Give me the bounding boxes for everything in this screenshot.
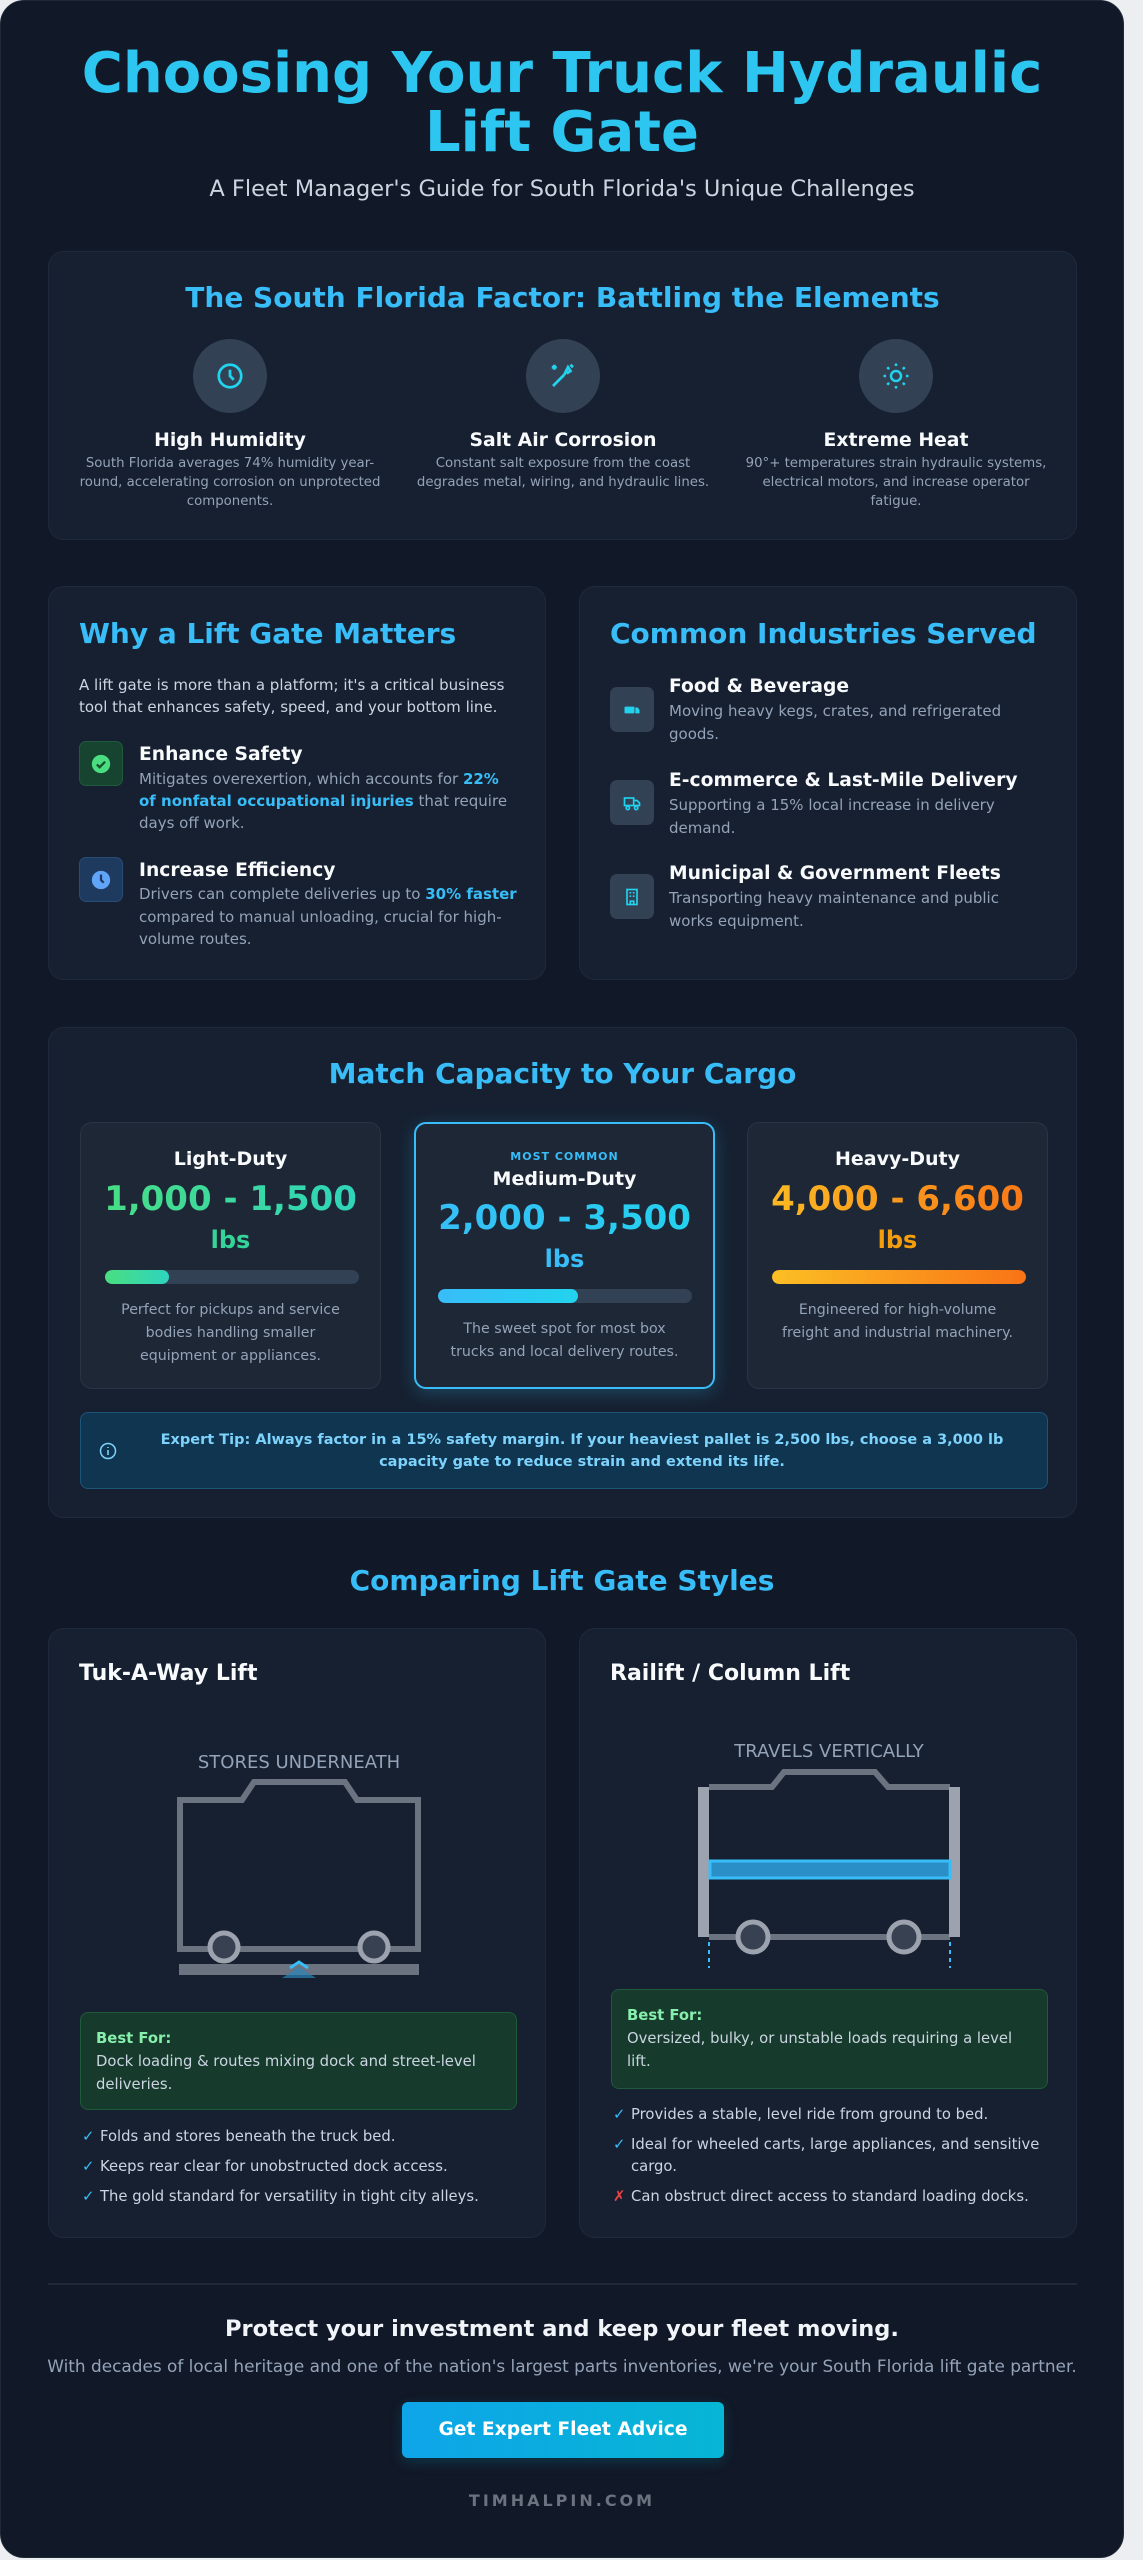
checklist: railift: Can obstruct direct access to standard loading docks.: [631, 2188, 1029, 2205]
best for: tuk-a-way: Best For:: [96, 2030, 171, 2047]
checklist: tuk-a-way: Folds and stores beneath the truck bed.: [100, 2128, 396, 2145]
icon: building: [610, 874, 654, 919]
title: Lift Gate: [425, 100, 699, 165]
button: Get Expert Fleet Advice: [438, 2419, 688, 2440]
card: heavy-duty: Heavy-Duty: [835, 1148, 960, 1170]
icon: delivery: [610, 780, 654, 825]
item: food & beverage: Moving heavy kegs, crates, and refrigerated goods.: [669, 702, 1001, 743]
item: food & beverage: [610, 676, 1001, 743]
checklist: tuk-a-way: The gold standard for versatility in tight city alleys.: [100, 2188, 479, 2205]
diagram: tuk-a-way truck: STORES UNDERNEATH: [198, 1752, 400, 1773]
card: medium-duty: lbs: [545, 1245, 584, 1273]
checklist: railift: ✓: [613, 2136, 625, 2153]
checklist: railift: Ideal for wheeled carts, large appliances, and sensitive cargo.: [631, 2136, 1039, 2175]
checklist: tuk-a-way: ✓: [82, 2128, 94, 2145]
card: light-duty: lbs: [211, 1226, 250, 1254]
checklist: tuk-a-way: [82, 2128, 479, 2205]
icon: clock: [79, 857, 123, 902]
card: light-duty: Perfect for pickups and service bodies handling smaller equipment or appliances.: [121, 1302, 340, 1364]
card: heavy-duty: [747, 1122, 1048, 1389]
item: increase efficiency: Increase Efficiency: [139, 860, 335, 881]
best for: tuk-a-way: Dock loading & routes mixing dock and street-level deliveries.: [96, 2053, 476, 2093]
column: salt air corrosion: [417, 339, 709, 490]
item: enhance safety: Enhance Safety: [139, 744, 303, 765]
icon: sun: [859, 339, 933, 413]
heading: south florida factor: The South Florida Factor: Battling the Elements: [185, 281, 940, 314]
card: heavy-duty: Engineered for high-volume: [799, 1302, 996, 1318]
item: increase efficiency: Drivers can complete deliveries up to 30% faster compared to manual unloading, crucial for high-volume routes.: [139, 885, 517, 948]
item: increase efficiency: [79, 857, 517, 948]
footer text: With decades of local heritage and one of the nation's largest parts inventories, we're your South Florida lift gate partner.: [47, 2356, 1077, 2376]
callout: expert tip: [80, 1412, 1048, 1489]
column: salt air corrosion: Salt Air Corrosion: [470, 430, 656, 451]
panel: railift: [579, 1628, 1077, 2238]
panel: match capacity: [48, 1027, 1077, 1518]
footer heading: Protect your investment and keep your fleet moving.: [225, 2316, 899, 2342]
card: medium-duty: The sweet spot for most box trucks and local delivery routes.: [451, 1321, 678, 1360]
checklist: railift: ✗: [613, 2188, 625, 2205]
best for: railift: [611, 1989, 1048, 2089]
column: salt air corrosion: degrades metal, wiring, and hydraulic lines.: [417, 475, 709, 490]
checklist: railift: [613, 2106, 1039, 2205]
card: heavy-duty: 4,000 - 6,600: [771, 1179, 1024, 1219]
checklist: tuk-a-way: ✓: [82, 2188, 94, 2205]
best for: tuk-a-way: [80, 2012, 517, 2110]
item: food & beverage: Food & Beverage: [669, 676, 849, 697]
checklist: tuk-a-way: Keeps rear clear for unobstructed dock access.: [100, 2158, 448, 2175]
panel: tuk-a-way: [48, 1628, 546, 2238]
best for: railift: Best For:: [627, 2007, 702, 2024]
title: Choosing Your Truck Hydraulic: [82, 41, 1042, 106]
item: municipal: [610, 863, 1001, 930]
bar: heavy: [772, 1270, 1026, 1284]
card: heavy-duty: lbs: [878, 1226, 917, 1254]
column: extreme heat: Extreme Heat: [824, 430, 968, 451]
item: municipal: Municipal & Government Fleets: [669, 863, 1001, 884]
item: enhance safety: Mitigates overexertion, which accounts for 22% of nonfatal occupational injuries that require days off work.: [139, 770, 507, 832]
title: [82, 41, 1042, 165]
checklist: railift: Provides a stable, level ride from ground to bed.: [631, 2106, 988, 2123]
card: light-duty: Light-Duty: [174, 1148, 287, 1170]
card: medium-duty: [414, 1122, 715, 1389]
diagram: tuk-a-way truck: [177, 1752, 421, 1978]
column: high humidity: components.: [187, 494, 273, 509]
checklist: tuk-a-way: ✓: [82, 2158, 94, 2175]
item: e-commerce: E-commerce & Last-Mile Delivery: [669, 770, 1018, 791]
diagram: railift truck: [698, 1741, 960, 1968]
column: extreme heat: [746, 339, 1046, 509]
brand: TIMHALPIN.COM: [469, 2491, 655, 2510]
card: medium-duty: Medium-Duty: [493, 1168, 636, 1190]
bar: medium: [438, 1289, 692, 1303]
column: salt air corrosion: Constant salt exposure from the coast: [436, 456, 690, 471]
heading: Common Industries Served: [610, 617, 1036, 650]
panel: why a lift gate matters: [48, 586, 546, 980]
column: high humidity: High Humidity: [154, 430, 306, 451]
card: heavy-duty: freight and industrial machinery.: [782, 1325, 1013, 1341]
button: [402, 2402, 724, 2458]
checklist: railift: ✓: [613, 2106, 625, 2123]
item: enhance safety: [79, 741, 507, 832]
column: extreme heat: 90°+ temperatures strain hydraulic systems,: [746, 456, 1046, 471]
card: light-duty: [80, 1122, 381, 1389]
callout: expert tip: Expert Tip: Always factor in a 15% safety margin. If your heaviest pallet is 2,500 lbs, choose a 3,000 lb capacity gate to reduce strain and extend its life.: [161, 1432, 1003, 1470]
bar: light: [105, 1270, 359, 1284]
column: extreme heat: fatigue.: [870, 494, 922, 509]
heading: Why a Lift Gate Matters: [79, 617, 456, 650]
icon: humidity: [193, 339, 267, 413]
diagram: railift truck: TRAVELS VERTICALLY: [733, 1741, 925, 1762]
panel: railift: Railift / Column Lift: [610, 1661, 850, 1686]
icon: info: [100, 1442, 116, 1460]
column: high humidity: round, accelerating corrosion on unprotected: [80, 475, 380, 490]
panel: south florida factor: [48, 251, 1077, 540]
panel: tuk-a-way: Tuk-A-Way Lift: [79, 1661, 257, 1686]
column: extreme heat: electrical motors, and increase operator: [762, 475, 1030, 490]
best for: railift: Oversized, bulky, or unstable loads requiring a level lift.: [627, 2030, 1012, 2070]
subtitle: A Fleet Manager's Guide for South Florida's Unique Challenges: [209, 176, 915, 202]
item: municipal: Transporting heavy maintenance and public works equipment.: [669, 889, 999, 930]
icon: truck: [610, 687, 654, 732]
card: medium-duty: 2,000 - 3,500: [438, 1198, 691, 1238]
heading: Match Capacity to Your Cargo: [329, 1057, 796, 1090]
intro text: A lift gate is more than a platform; it's a critical business tool that enhances safety, speed, and your bottom line.: [79, 676, 504, 716]
icon: check: [79, 741, 123, 786]
item: e-commerce: [610, 770, 1018, 837]
card: medium-duty: MOST COMMON: [510, 1150, 619, 1163]
column: high humidity: South Florida averages 74% humidity year-: [86, 456, 374, 471]
column: high humidity: [80, 339, 380, 509]
card: light-duty: 1,000 - 1,500: [104, 1179, 357, 1219]
heading: comparing lift gate styles: Comparing Lift Gate Styles: [350, 1564, 774, 1597]
icon: corrosion: [526, 339, 600, 413]
panel: common industries: [579, 586, 1077, 980]
item: e-commerce: Supporting a 15% local increase in delivery demand.: [669, 796, 995, 837]
